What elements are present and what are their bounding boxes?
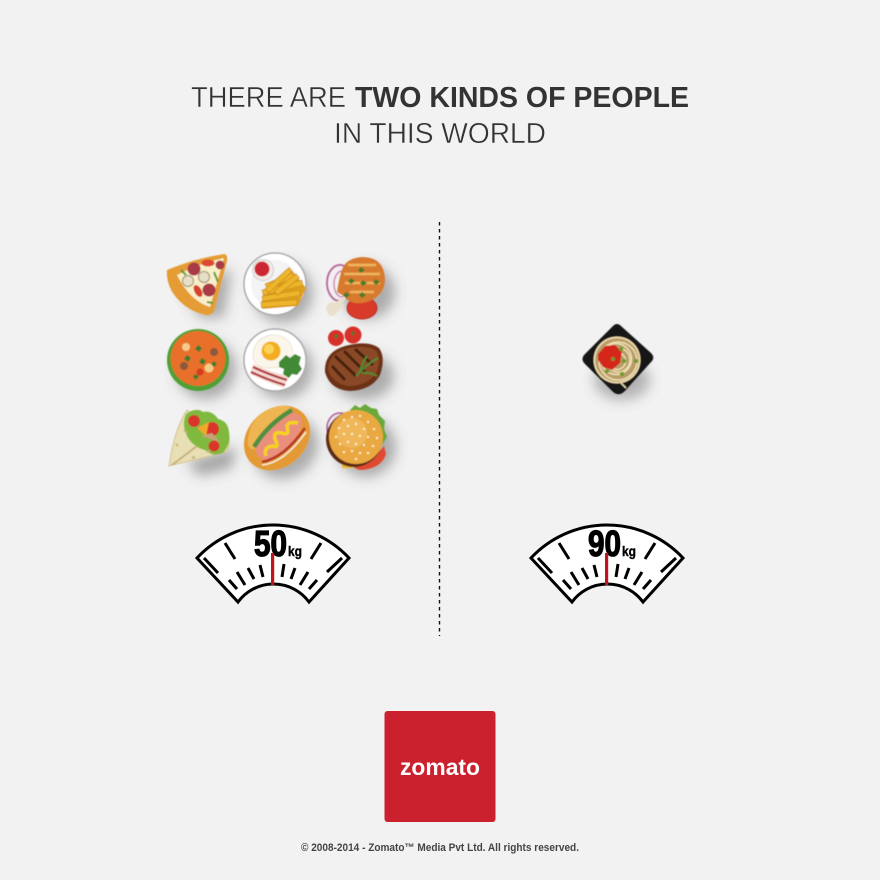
title xyxy=(191,82,689,150)
icon: pizza slice xyxy=(167,254,232,318)
panel: many foods xyxy=(167,253,396,492)
gauge needle xyxy=(605,553,608,585)
icon: wrap xyxy=(169,410,236,476)
gauge reading: 90kg: kg xyxy=(622,543,636,559)
title: IN THIS WORLD xyxy=(334,118,546,150)
icon: pasta plate xyxy=(582,324,653,400)
icon: soup bowl xyxy=(167,329,236,399)
gauge: 90 kg scale xyxy=(531,523,683,602)
icon: fries plate xyxy=(244,253,313,323)
icon: hot dog xyxy=(231,392,331,492)
gauge ticks xyxy=(204,543,342,589)
icon: egg and bacon plate xyxy=(244,329,313,399)
title: THERE ARE xyxy=(191,82,346,114)
gauge: 50 kg scale xyxy=(197,523,349,602)
divider: dashed line xyxy=(438,222,440,636)
logo: zomato xyxy=(384,711,496,822)
logo: zomato: zomato xyxy=(400,754,480,780)
gauge reading: 50kg: kg xyxy=(288,543,302,559)
gauge reading: 90kg: 90 xyxy=(588,523,621,564)
footer copyright: © 2008-2014 - Zomato™ Media Pvt Ltd. All rights reserved. xyxy=(301,842,579,854)
icon: grilled chicken xyxy=(327,257,395,319)
icon: burger xyxy=(326,404,396,477)
icon: steak and tomatoes xyxy=(325,326,394,400)
gauge needle xyxy=(271,553,274,585)
title: TWO KINDS OF PEOPLE xyxy=(355,82,689,114)
gauge ticks xyxy=(538,543,676,589)
gauge reading: 50kg: 50 xyxy=(254,523,287,564)
